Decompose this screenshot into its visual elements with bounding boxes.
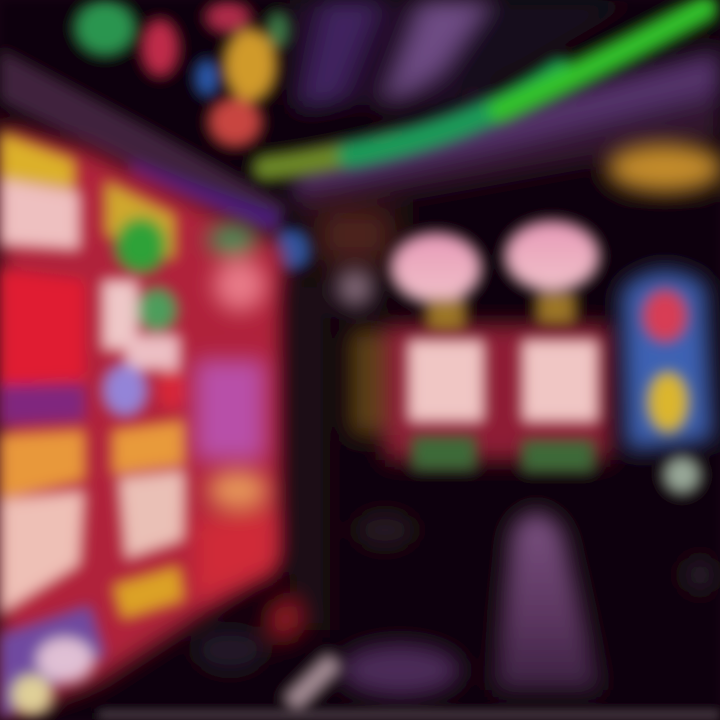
machine screens xyxy=(408,340,598,472)
dark machine edge xyxy=(194,280,330,672)
blue slot machine on right xyxy=(622,271,712,493)
diagonal purple trim xyxy=(0,50,310,270)
column 1 panels xyxy=(0,132,105,720)
column 3 panels xyxy=(195,226,275,600)
column 2 panels xyxy=(102,180,186,620)
ceiling lamp xyxy=(607,144,720,192)
green light arc xyxy=(265,8,705,168)
top-left coloured lights xyxy=(75,1,288,146)
machine tops xyxy=(392,222,598,330)
left slot machine bank xyxy=(0,125,285,720)
ceiling lights and purple drapes xyxy=(265,0,720,215)
floor, stool and seated figure xyxy=(100,512,720,720)
centre slot machine pair xyxy=(315,205,610,472)
